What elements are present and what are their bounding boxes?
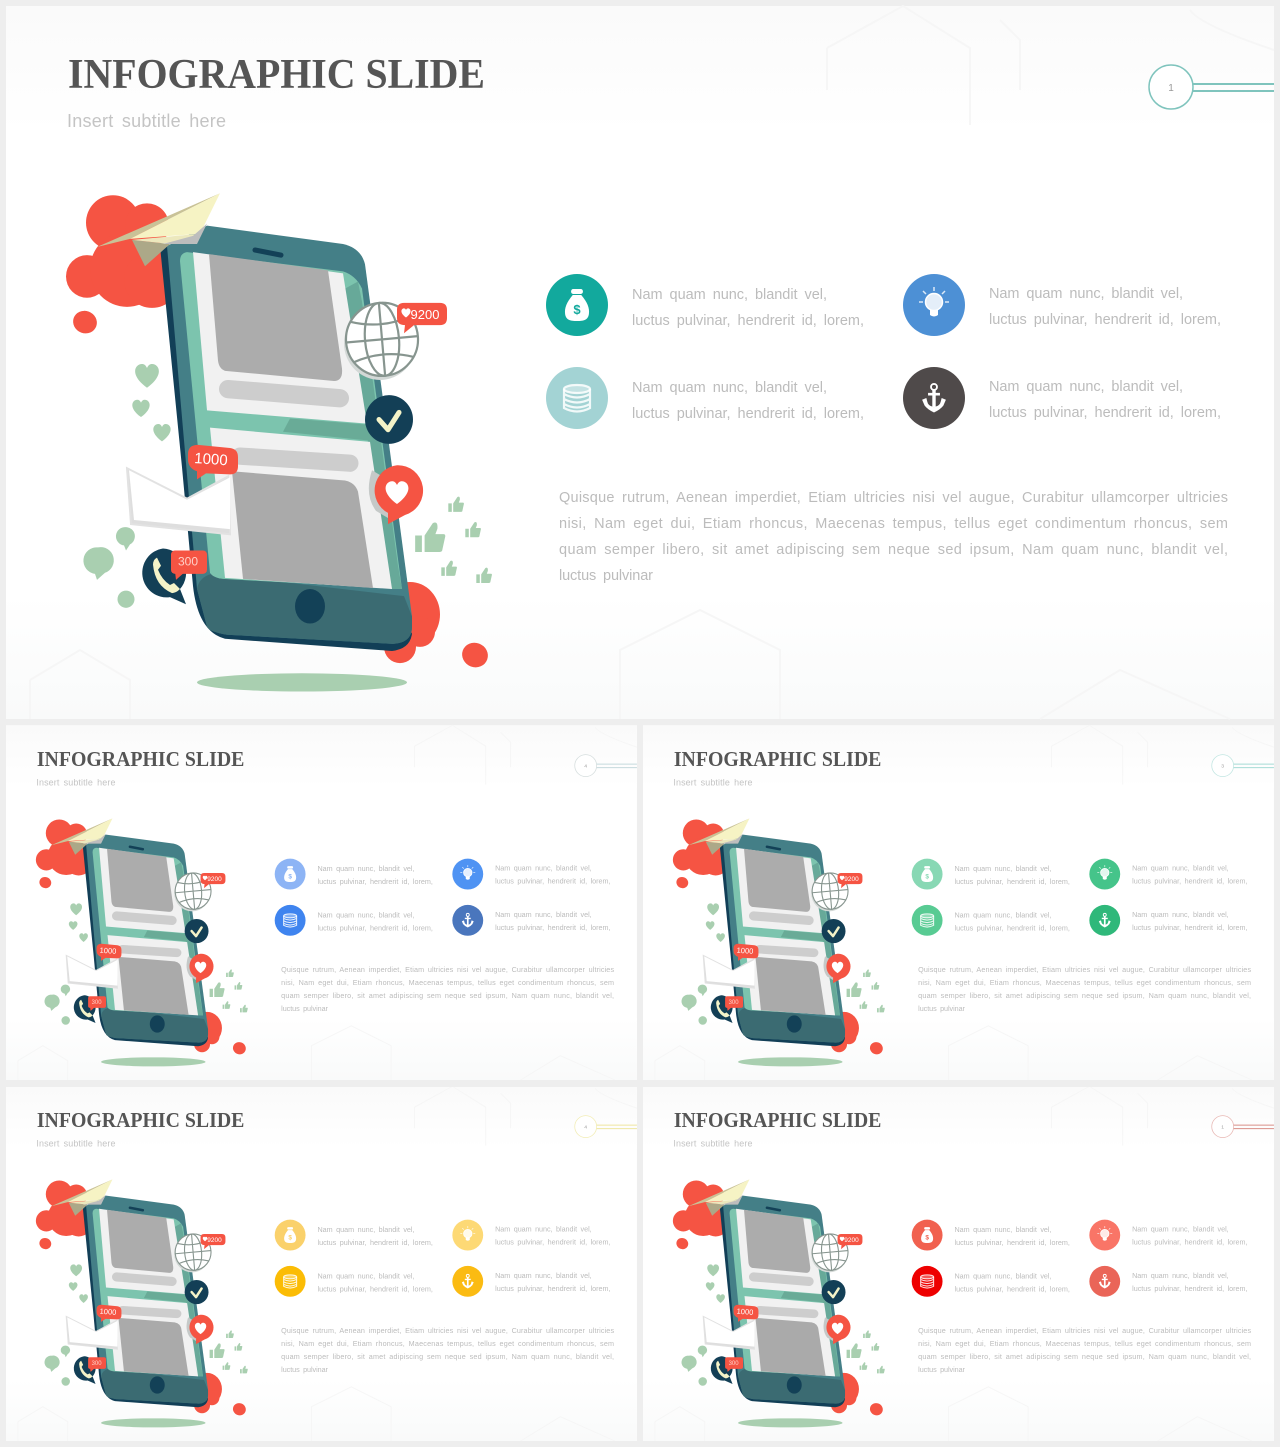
panel background bbox=[643, 1086, 1274, 1441]
paragraph: quam semper libero, sit amet adipiscing sem neque sed ipsum, Nam quam nunc, blandit vel, bbox=[281, 991, 614, 1000]
icon: coins bbox=[275, 1266, 306, 1297]
icon: money bag bbox=[912, 1220, 943, 1250]
title: INFOGRAPHIC SLIDE bbox=[37, 747, 244, 771]
paragraph: Quisque rutrum, Aenean imperdiet, Etiam ultricies nisi vel augue, Curabitur ullamcorper ultricies bbox=[918, 965, 1251, 974]
text: item four: luctus pulvinar, hendrerit id, lorem, bbox=[989, 405, 1221, 421]
icon: money bag bbox=[275, 859, 306, 889]
text: item three: luctus pulvinar, hendrerit id, lorem, bbox=[317, 1284, 433, 1293]
paragraph: Quisque rutrum, Aenean imperdiet, Etiam ultricies nisi vel augue, Curabitur ullamcorper ultricies bbox=[281, 965, 614, 974]
text: item two: Nam quam nunc, blandit vel, bbox=[1132, 864, 1229, 873]
text: item four bbox=[989, 379, 1221, 421]
icon: anchor bbox=[903, 367, 965, 429]
paragraph: quam semper libero, sit amet adipiscing sem neque sed ipsum, Nam quam nunc, blandit vel, bbox=[559, 542, 1228, 558]
page number marker: 3 bbox=[1221, 764, 1224, 770]
text: item one: luctus pulvinar, hendrerit id, lorem, bbox=[317, 877, 433, 886]
text: item two: Nam quam nunc, blandit vel, bbox=[495, 1225, 592, 1234]
paragraph: nisi, Nam eget dui, Etiam rhoncus, Maecenas tempus, tellus eget condimentum rhoncus, sem bbox=[281, 978, 614, 987]
paragraph: luctus pulvinar bbox=[281, 1365, 329, 1374]
phone illustration: 1000 bbox=[99, 946, 117, 956]
subtitle: Insert subtitle here bbox=[67, 111, 226, 131]
icon: light bulb bbox=[903, 274, 965, 336]
phone illustration bbox=[673, 1179, 885, 1427]
text: item two: luctus pulvinar, hendrerit id, lorem, bbox=[989, 312, 1221, 328]
phone illustration: 300 bbox=[729, 1361, 739, 1367]
icon: money bag: $ bbox=[288, 1235, 292, 1242]
text: item two bbox=[989, 286, 1221, 328]
paragraph: quam semper libero, sit amet adipiscing sem neque sed ipsum, Nam quam nunc, blandit vel, bbox=[281, 1352, 614, 1361]
text: item one: luctus pulvinar, hendrerit id, lorem, bbox=[954, 877, 1070, 886]
paragraph bbox=[281, 965, 614, 1013]
text: item two bbox=[1132, 864, 1248, 886]
page number marker bbox=[1212, 1116, 1274, 1138]
page number marker bbox=[575, 1116, 637, 1138]
text: item three: Nam quam nunc, blandit vel, bbox=[954, 1271, 1052, 1280]
icon: light bulb bbox=[1089, 1220, 1120, 1250]
text: item four: Nam quam nunc, blandit vel, bbox=[1132, 910, 1229, 919]
text: item one bbox=[317, 864, 433, 886]
paragraph bbox=[918, 965, 1251, 1013]
page number marker: 1 bbox=[1168, 83, 1174, 94]
paragraph: Quisque rutrum, Aenean imperdiet, Etiam ultricies nisi vel augue, Curabitur ullamcorper ultricies bbox=[918, 1326, 1251, 1335]
text: item three bbox=[954, 1271, 1070, 1293]
phone illustration: 9200 bbox=[207, 1237, 222, 1244]
text: item three: luctus pulvinar, hendrerit id, lorem, bbox=[954, 1284, 1070, 1293]
title: INFOGRAPHIC SLIDE bbox=[674, 747, 881, 771]
icon: money bag: $ bbox=[925, 874, 929, 881]
text: item three: Nam quam nunc, blandit vel, bbox=[317, 910, 415, 919]
text: item four: luctus pulvinar, hendrerit id, lorem, bbox=[495, 1284, 611, 1293]
text: item three: Nam quam nunc, blandit vel, bbox=[954, 910, 1052, 919]
icon: light bulb bbox=[452, 859, 483, 889]
text: item four: luctus pulvinar, hendrerit id, lorem, bbox=[495, 923, 611, 932]
paragraph: nisi, Nam eget dui, Etiam rhoncus, Maecenas tempus, tellus eget condimentum rhoncus, sem bbox=[559, 516, 1228, 532]
icon: anchor bbox=[452, 905, 483, 936]
text: item three: luctus pulvinar, hendrerit id, lorem, bbox=[954, 923, 1070, 932]
subtitle: Insert subtitle here bbox=[673, 1138, 752, 1148]
text: item two: luctus pulvinar, hendrerit id, lorem, bbox=[1132, 877, 1248, 886]
text: item four: luctus pulvinar, hendrerit id, lorem, bbox=[1132, 1284, 1248, 1293]
paragraph: luctus pulvinar bbox=[918, 1004, 966, 1013]
text: item three bbox=[632, 380, 864, 422]
text: item one: Nam quam nunc, blandit vel, bbox=[317, 864, 415, 873]
icon: anchor bbox=[1089, 1266, 1120, 1297]
phone illustration bbox=[66, 193, 492, 692]
panel background bbox=[6, 6, 1274, 719]
page number marker bbox=[1149, 65, 1274, 109]
title: INFOGRAPHIC SLIDE bbox=[674, 1108, 881, 1132]
phone illustration: 300 bbox=[729, 1000, 739, 1006]
text: item two: luctus pulvinar, hendrerit id, lorem, bbox=[1132, 1238, 1248, 1247]
icon: coins bbox=[275, 905, 306, 936]
paragraph: luctus pulvinar bbox=[281, 1004, 329, 1013]
paragraph: nisi, Nam eget dui, Etiam rhoncus, Maecenas tempus, tellus eget condimentum rhoncus, sem bbox=[918, 1339, 1251, 1348]
text: item one: Nam quam nunc, blandit vel, bbox=[954, 1225, 1052, 1234]
phone illustration: 300 bbox=[92, 1000, 102, 1006]
text: item three bbox=[317, 1271, 433, 1293]
icon: money bag: $ bbox=[573, 302, 581, 317]
text: item one: Nam quam nunc, blandit vel, bbox=[317, 1225, 415, 1234]
phone illustration: 1000 bbox=[736, 1307, 754, 1317]
text: item one bbox=[954, 864, 1070, 886]
phone illustration: 1000 bbox=[736, 946, 754, 956]
text: item one: Nam quam nunc, blandit vel, bbox=[632, 287, 827, 303]
phone illustration: 300 bbox=[92, 1361, 102, 1367]
phone illustration: 9200 bbox=[207, 876, 222, 883]
paragraph: nisi, Nam eget dui, Etiam rhoncus, Maecenas tempus, tellus eget condimentum rhoncus, sem bbox=[281, 1339, 614, 1348]
text: item three: Nam quam nunc, blandit vel, bbox=[632, 380, 827, 396]
page number marker bbox=[575, 755, 637, 777]
subtitle: Insert subtitle here bbox=[36, 1138, 115, 1148]
text: item four bbox=[1132, 910, 1248, 932]
phone illustration: 1000 bbox=[99, 1307, 117, 1317]
page number marker: 1 bbox=[1221, 1125, 1224, 1131]
text: item one bbox=[317, 1225, 433, 1247]
text: item four bbox=[1132, 1271, 1248, 1293]
text: item four: Nam quam nunc, blandit vel, bbox=[989, 379, 1183, 395]
icon: money bag: $ bbox=[288, 874, 292, 881]
text: item three: luctus pulvinar, hendrerit id, lorem, bbox=[317, 923, 433, 932]
icon: money bag bbox=[546, 274, 608, 336]
panel background bbox=[6, 1086, 637, 1441]
text: item four: Nam quam nunc, blandit vel, bbox=[495, 1271, 592, 1280]
paragraph: nisi, Nam eget dui, Etiam rhoncus, Maecenas tempus, tellus eget condimentum rhoncus, sem bbox=[918, 978, 1251, 987]
paragraph bbox=[559, 490, 1228, 584]
panel background bbox=[6, 725, 637, 1080]
title: INFOGRAPHIC SLIDE bbox=[37, 1108, 244, 1132]
phone illustration: 9200 bbox=[844, 1237, 859, 1244]
icon: money bag bbox=[275, 1220, 306, 1250]
slide 1: teal main slide bbox=[6, 6, 1274, 719]
icon: light bulb bbox=[452, 1220, 483, 1250]
paragraph: quam semper libero, sit amet adipiscing sem neque sed ipsum, Nam quam nunc, blandit vel, bbox=[918, 1352, 1251, 1361]
text: item one: luctus pulvinar, hendrerit id, lorem, bbox=[632, 313, 864, 329]
slide 5: red variant bbox=[643, 1086, 1274, 1441]
slide 4: yellow variant bbox=[6, 1086, 637, 1441]
phone illustration bbox=[36, 1179, 248, 1427]
text: item three bbox=[317, 910, 433, 932]
page number marker: 4 bbox=[584, 764, 587, 770]
text: item one bbox=[632, 287, 864, 329]
paragraph bbox=[918, 1326, 1251, 1374]
icon: coins bbox=[912, 1266, 943, 1297]
text: item three: Nam quam nunc, blandit vel, bbox=[317, 1271, 415, 1280]
subtitle: Insert subtitle here bbox=[673, 777, 752, 787]
icon: coins bbox=[912, 905, 943, 936]
text: item four bbox=[495, 910, 611, 932]
icon: anchor bbox=[452, 1266, 483, 1297]
phone illustration: 9200 bbox=[844, 876, 859, 883]
icon: light bulb bbox=[1089, 859, 1120, 889]
phone illustration bbox=[36, 818, 248, 1066]
phone illustration: 1000 bbox=[194, 450, 228, 469]
text: item four: Nam quam nunc, blandit vel, bbox=[1132, 1271, 1229, 1280]
text: item one: luctus pulvinar, hendrerit id, lorem, bbox=[954, 1238, 1070, 1247]
slide 2: blue variant bbox=[6, 725, 637, 1080]
text: item two bbox=[495, 1225, 611, 1247]
paragraph: Quisque rutrum, Aenean imperdiet, Etiam ultricies nisi vel augue, Curabitur ullamcorper ultricies bbox=[281, 1326, 614, 1335]
paragraph: Quisque rutrum, Aenean imperdiet, Etiam ultricies nisi vel augue, Curabitur ullamcorper ultricies bbox=[559, 490, 1228, 506]
phone illustration: 300 bbox=[178, 555, 198, 569]
text: item three bbox=[954, 910, 1070, 932]
page number marker bbox=[1212, 755, 1274, 777]
phone illustration bbox=[673, 818, 885, 1066]
text: item one bbox=[954, 1225, 1070, 1247]
text: item two: luctus pulvinar, hendrerit id, lorem, bbox=[495, 1238, 611, 1247]
text: item one: Nam quam nunc, blandit vel, bbox=[954, 864, 1052, 873]
text: item two: Nam quam nunc, blandit vel, bbox=[1132, 1225, 1229, 1234]
paragraph bbox=[281, 1326, 614, 1374]
paragraph: luctus pulvinar bbox=[918, 1365, 966, 1374]
text: item two bbox=[1132, 1225, 1248, 1247]
paragraph: luctus pulvinar bbox=[559, 568, 653, 584]
icon: coins bbox=[546, 367, 608, 429]
text: item two: luctus pulvinar, hendrerit id, lorem, bbox=[495, 877, 611, 886]
phone illustration: 9200 bbox=[411, 307, 439, 322]
page number marker: 4 bbox=[584, 1125, 587, 1131]
text: item two: Nam quam nunc, blandit vel, bbox=[989, 286, 1183, 302]
slide 3: green variant bbox=[643, 725, 1274, 1080]
title: INFOGRAPHIC SLIDE bbox=[68, 52, 485, 98]
icon: money bag: $ bbox=[925, 1235, 929, 1242]
subtitle: Insert subtitle here bbox=[36, 777, 115, 787]
text: item one: luctus pulvinar, hendrerit id, lorem, bbox=[317, 1238, 433, 1247]
text: item four: luctus pulvinar, hendrerit id, lorem, bbox=[1132, 923, 1248, 932]
text: item two bbox=[495, 864, 611, 886]
text: item four: Nam quam nunc, blandit vel, bbox=[495, 910, 592, 919]
icon: anchor bbox=[1089, 905, 1120, 936]
text: item four bbox=[495, 1271, 611, 1293]
panel background bbox=[643, 725, 1274, 1080]
text: item three: luctus pulvinar, hendrerit id, lorem, bbox=[632, 406, 864, 422]
paragraph: quam semper libero, sit amet adipiscing sem neque sed ipsum, Nam quam nunc, blandit vel, bbox=[918, 991, 1251, 1000]
icon: money bag bbox=[912, 859, 943, 889]
text: item two: Nam quam nunc, blandit vel, bbox=[495, 864, 592, 873]
